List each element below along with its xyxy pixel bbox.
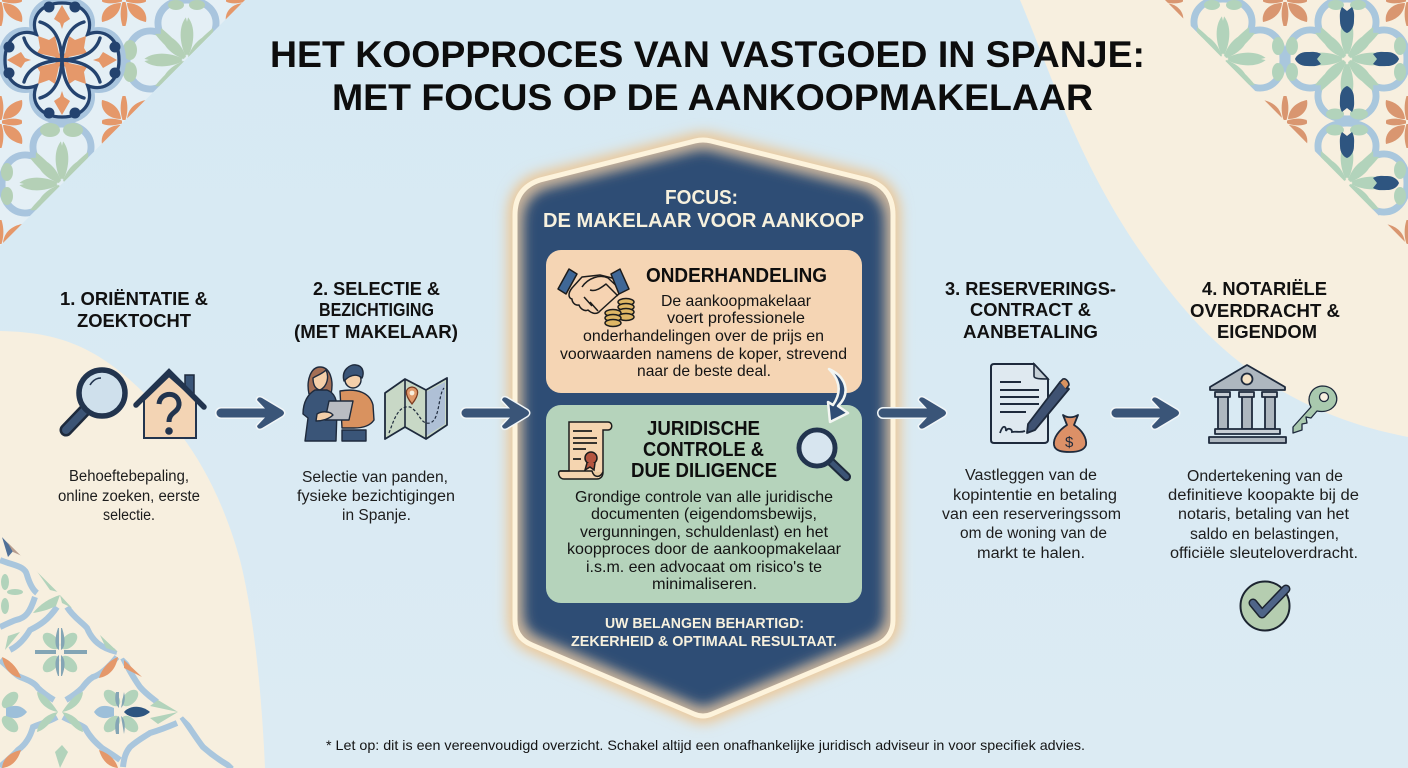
shield body (510, 135, 900, 725)
step 4: heading: EIGENDOM (1217, 322, 1317, 342)
title: HET KOOPPROCES VAN VASTGOED IN SPANJE: (270, 34, 1145, 75)
icon: magnifier (66, 370, 125, 430)
step 4: text: Ondertekening van de (1187, 468, 1343, 485)
arrow 1 (216, 397, 284, 429)
card: juridische controle: DUE DILIGENCE (631, 460, 777, 482)
tile corner top right (1165, 0, 1408, 244)
arrow 3 (878, 397, 946, 429)
card: juridische controle: vergunningen, schuldenlast) en het (580, 524, 829, 541)
icon: magnifier (799, 430, 847, 477)
step 1: heading (60, 289, 208, 331)
step 4: text: saldo en belastingen, (1190, 526, 1339, 543)
step 4: heading (1190, 279, 1340, 342)
arrow 2 (462, 397, 529, 429)
shield heading: FOCUS: (665, 187, 738, 209)
step 2: heading: (MET MAKELAAR) (294, 322, 458, 342)
shield footer text: UW BELANGEN BEHARTIGD: (605, 615, 804, 632)
shield footer text: ZEKERHEID & OPTIMAAL RESULTAAT. (571, 633, 837, 650)
tile corner bottom left (0, 537, 233, 768)
icon: couple with tablet (303, 365, 374, 441)
cream blob bottom left (0, 331, 265, 768)
icon: check badge (1240, 582, 1290, 630)
arrow 4 (1112, 397, 1179, 429)
shield heading: DE MAKELAAR VOOR AANKOOP (543, 210, 864, 232)
step 3: text: Vastleggen van de (965, 467, 1097, 484)
card: onderhandeling: voorwaarden namens de koper, strevend (560, 346, 847, 363)
step 3: text (942, 467, 1121, 562)
step 4: heading: 4. NOTARIËLE (1202, 279, 1327, 299)
card: juridische controle (546, 405, 862, 603)
card: onderhandeling: onderhandelingen over de prijs en (583, 328, 824, 345)
panel: focus shield (510, 135, 900, 725)
step 4: text: officiële sleuteloverdracht. (1170, 545, 1358, 562)
shield footer text (571, 615, 837, 650)
step 4: text: definitieve koopakte bij de (1168, 487, 1359, 504)
card: juridische controle: JURIDISCHE (647, 418, 760, 440)
icon: key (1293, 386, 1337, 433)
step 1: text: Behoeftebepaling, (69, 468, 189, 485)
step 2: heading: 2. SELECTIE & (313, 279, 440, 299)
step 1: text: selectie. (103, 507, 155, 524)
step 2: text (297, 469, 455, 524)
card: onderhandeling: ONDERHANDELING (646, 265, 827, 287)
step 3: heading: 3. RESERVERINGS- (945, 279, 1116, 299)
shield heading (543, 187, 864, 232)
step 4: text: notaris, betaling van het (1178, 506, 1350, 523)
card: juridische controle: i.s.m. een advocaat om risico's te (586, 559, 822, 576)
card: juridische controle: koopproces door de aankoopmakelaar (567, 541, 842, 558)
card: juridische controle: CONTROLE & (643, 439, 764, 461)
step 3: text: kopintentie en betaling (953, 487, 1117, 504)
step 3: text: van een reserveringssom (942, 506, 1121, 523)
icon: house with question mark (136, 372, 204, 438)
step 2: text: fysieke bezichtigingen (297, 488, 455, 505)
icon: money bag (1054, 415, 1086, 452)
card: juridische controle: documenten (eigendomsbewijs, (591, 506, 817, 523)
step 3: heading: CONTRACT & (970, 300, 1091, 320)
card: onderhandeling: voert professionele (667, 310, 805, 327)
step 2: heading: BEZICHTIGING (319, 300, 434, 320)
step 2: text: Selectie van panden, (302, 469, 448, 486)
step 3: heading (945, 279, 1116, 342)
cream blob top right (1020, 0, 1408, 437)
icon: money bag: $ (1065, 434, 1074, 451)
icon: scroll with seal (559, 422, 612, 479)
step 3: text: om de woning van de (960, 525, 1107, 542)
step 1: text (58, 468, 200, 524)
card: juridische controle: minimaliseren. (652, 576, 757, 593)
step 1: text: online zoeken, eerste (58, 488, 200, 505)
icon: map with pin (385, 378, 447, 439)
icon: notary building (1209, 365, 1286, 443)
step 3: text: markt te halen. (977, 545, 1085, 562)
icon: handshake (558, 269, 634, 326)
title: MET FOCUS OP DE AANKOOPMAKELAAR (332, 77, 1093, 118)
arrow: curved between cards (828, 369, 848, 422)
shield border (515, 140, 893, 716)
card: onderhandeling: De aankoopmakelaar (661, 293, 812, 310)
step 4: text (1168, 468, 1359, 562)
step 2: heading (294, 279, 458, 342)
card: juridische controle: Grondige controle van alle juridische (575, 489, 833, 506)
icon: contract with pen (991, 364, 1069, 443)
step 4: heading: OVERDRACHT & (1190, 301, 1340, 321)
step 1: heading: ZOEKTOCHT (77, 311, 191, 331)
card: onderhandeling: naar de beste deal. (637, 363, 771, 380)
title (270, 34, 1145, 118)
step 2: text: in Spanje. (342, 507, 411, 524)
step 3: heading: AANBETALING (963, 322, 1098, 342)
shield glow (515, 140, 893, 716)
step 1: heading: 1. ORIËNTATIE & (60, 289, 208, 309)
tile corner top left (0, 0, 245, 246)
card: onderhandeling (546, 250, 862, 393)
footnote: * Let op: dit is een vereenvoudigd overzicht. Schakel altijd een onafhankelijke juridisch adviseur in voor specifiek advies. (326, 737, 1085, 753)
